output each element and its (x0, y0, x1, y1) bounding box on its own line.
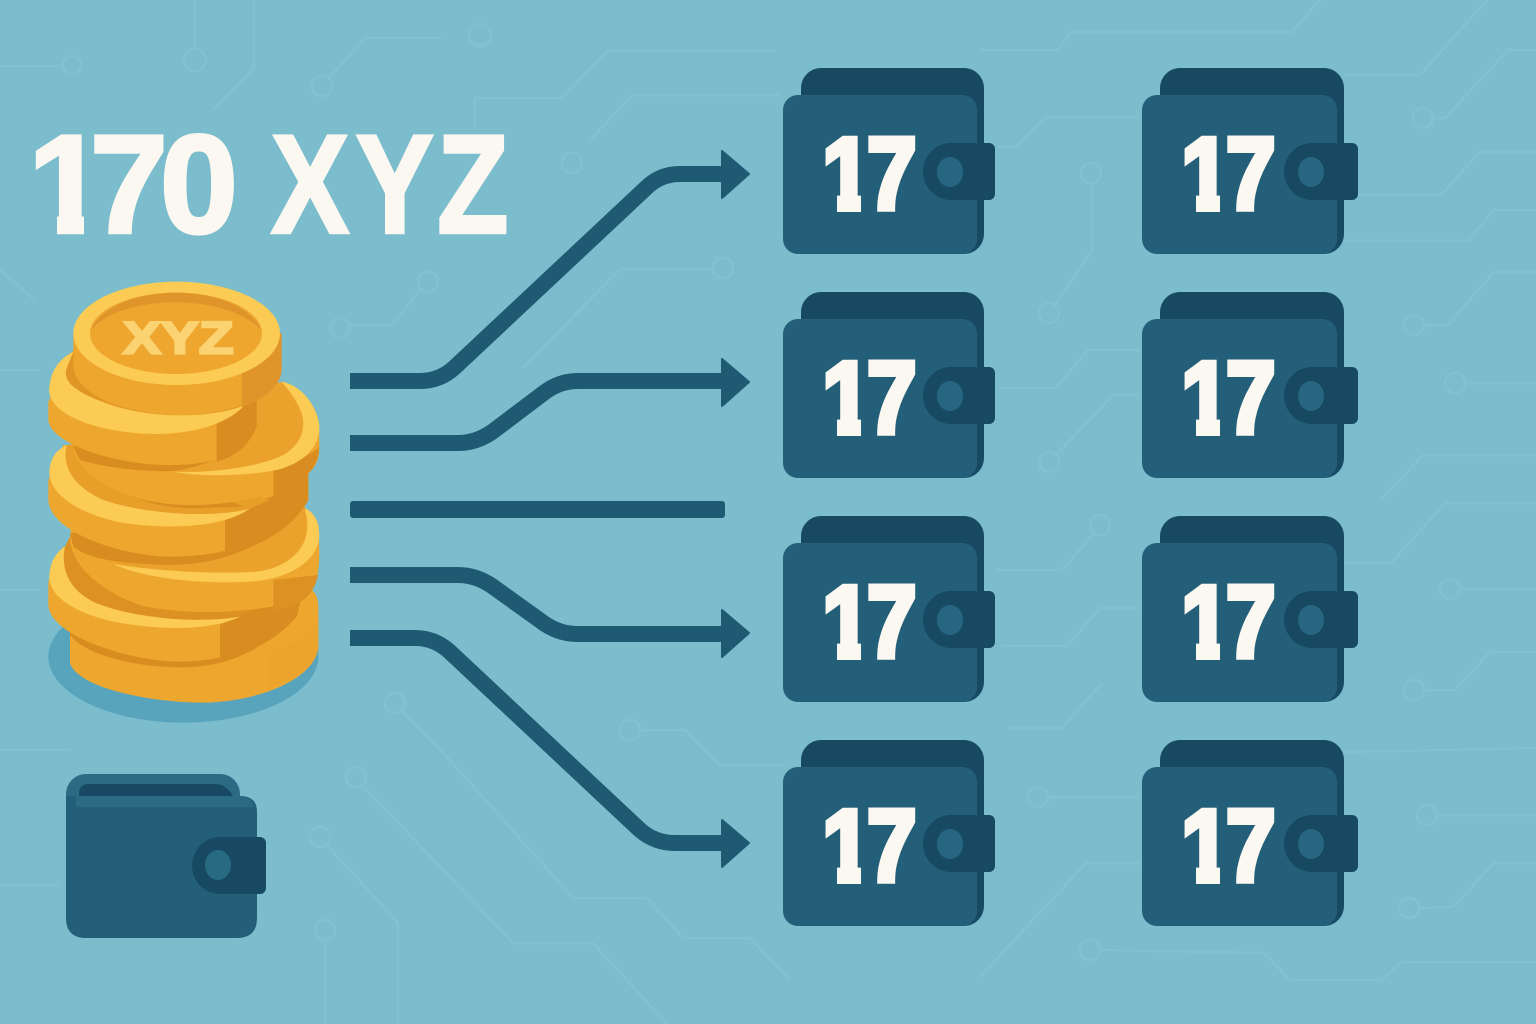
coin label: XYZ (123, 313, 234, 364)
title: XYZ (271, 107, 508, 263)
title (36, 133, 506, 236)
arrow 5 (350, 638, 749, 867)
title: 170 (28, 106, 238, 262)
source wallet (66, 774, 266, 938)
wallet row 3 column 1: 17 (822, 565, 916, 679)
coin 1 (bottom) (70, 585, 318, 703)
wallet row 2 column 1: 17 (822, 341, 916, 455)
arrow 2 (350, 359, 749, 443)
wallet row 3 column 2: 17 (1181, 565, 1275, 679)
wallet row 1 column 2 (1142, 68, 1358, 254)
wallet row 3 column 1 (783, 516, 995, 702)
coin 7 (top) (73, 282, 282, 415)
coin stack ground shadow (48, 591, 318, 723)
wallet row 2 column 2: 17 (1181, 341, 1275, 455)
arrow 4 (350, 575, 749, 657)
wallet row 2 column 1 (783, 292, 995, 478)
coin 4 (48, 443, 308, 557)
arrow 1 (350, 151, 749, 381)
wallet row 1 column 1 (783, 68, 995, 254)
wallet row 2 column 2 (1142, 292, 1358, 478)
coin 5 (73, 382, 319, 505)
wallet row 1 column 2: 17 (1181, 117, 1275, 231)
wallet row 4 column 1 (783, 740, 995, 926)
wallet row 1 column 1: 17 (822, 117, 916, 231)
coin 3 (70, 503, 319, 612)
wallet row 4 column 2: 17 (1181, 789, 1275, 903)
wallet row 3 column 2 (1142, 516, 1358, 702)
coin stack (48, 282, 319, 723)
bar 3 (350, 501, 725, 518)
wallet row 4 column 2 (1142, 740, 1358, 926)
coin 6 (48, 350, 263, 465)
coin 2 (48, 537, 303, 662)
wallet row 4 column 1: 17 (822, 789, 916, 903)
